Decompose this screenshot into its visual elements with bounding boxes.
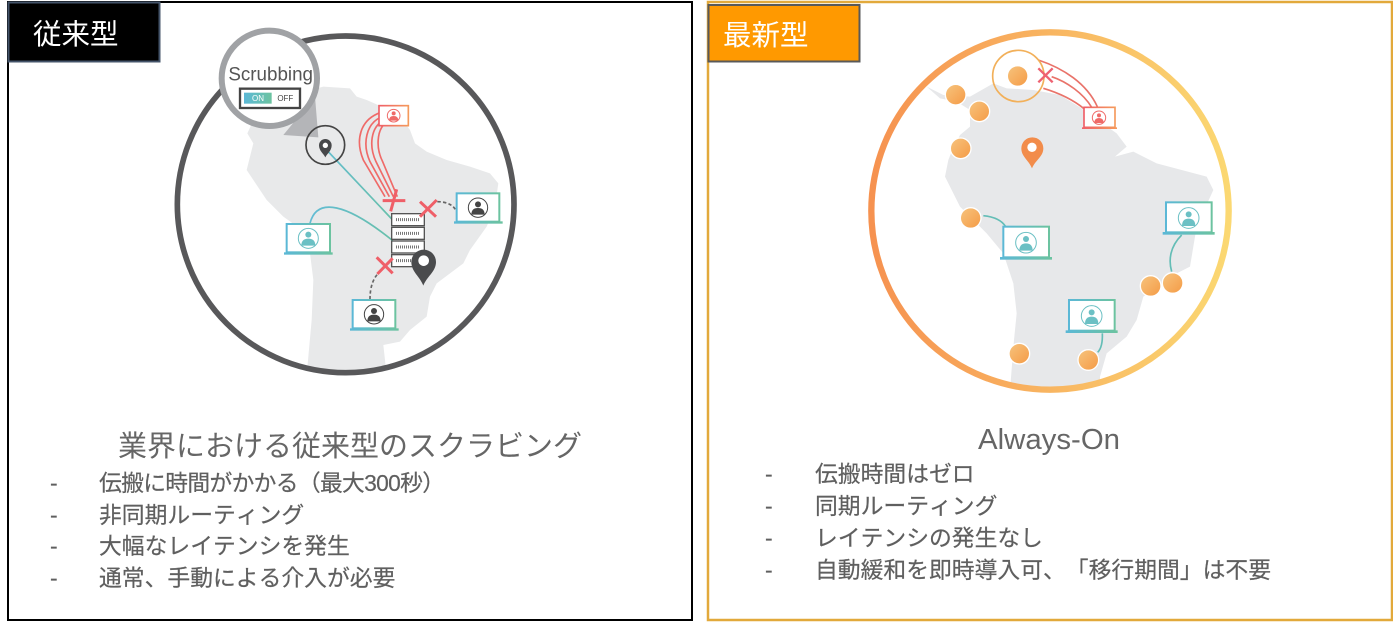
list: conventional: - <box>50 533 58 559</box>
list: latest: 伝搬時間はゼロ <box>815 461 975 487</box>
list: conventional: 通常、手動による介入が必要 <box>99 565 395 591</box>
label: latest: 最新型 <box>723 20 809 52</box>
laptop: user east <box>1163 202 1215 235</box>
list: latest: レイテンシの発生なし <box>815 525 1043 551</box>
map: South America <box>927 83 1213 390</box>
list: conventional: 非同期ルーティング <box>99 502 304 528</box>
attack traffic <box>1038 60 1097 109</box>
heading: conventional: 業界における従来型のスクラビング <box>118 430 582 463</box>
map: South America <box>247 87 498 375</box>
heading: always-on: Always-On <box>978 424 1120 456</box>
connections: blue routes <box>310 150 393 241</box>
pin in circle <box>306 126 345 164</box>
diagram: conventional scrubbing <box>177 31 514 375</box>
list: conventional: - <box>50 470 58 496</box>
callout shadow <box>283 97 318 137</box>
connections: teal <box>983 216 1182 352</box>
list: conventional: 伝搬に時間がかかる（最大300秒） <box>99 470 445 496</box>
attack traffic <box>359 113 397 197</box>
panel: latest <box>708 2 1392 620</box>
lens: scrubbing toggle <box>222 31 317 126</box>
panel: conventional <box>8 2 692 620</box>
blocked paths <box>370 202 456 299</box>
list: conventional: 大幅なレイテンシを発生 <box>99 533 350 559</box>
list: conventional: - <box>50 502 58 528</box>
server <box>392 214 424 267</box>
list: conventional <box>50 470 445 591</box>
label: conventional <box>8 2 160 62</box>
label: latest <box>708 5 860 62</box>
laptop: blue user <box>284 224 333 255</box>
laptop: attacker <box>1082 107 1117 129</box>
list: latest: - <box>765 461 773 487</box>
list: latest: 自動緩和を即時導入可、「移行期間」は不要 <box>815 557 1271 583</box>
list: conventional: - <box>50 565 58 591</box>
list: latest <box>765 461 1271 583</box>
list: latest: - <box>765 557 773 583</box>
lens: scrubbing toggle: OFF <box>277 94 293 103</box>
cross mark <box>1038 68 1053 82</box>
scrubbing nodes <box>945 66 1183 370</box>
highlight circle <box>993 50 1044 102</box>
laptop: user west <box>1000 227 1052 260</box>
laptop: blocked user right <box>454 193 503 224</box>
red blocked wall <box>383 189 405 211</box>
lens: scrubbing toggle: Scrubbing <box>228 64 313 85</box>
label: conventional: 従来型 <box>33 19 119 51</box>
pin: orange <box>1021 137 1043 168</box>
diagram: always-on <box>871 32 1229 390</box>
laptop: blocked user bottom <box>350 300 399 331</box>
laptop: user south <box>1066 300 1118 333</box>
list: latest: - <box>765 525 773 551</box>
list: latest: - <box>765 493 773 519</box>
pin: server location <box>411 250 436 286</box>
ring <box>177 36 514 373</box>
list: latest: 同期ルーティング <box>815 493 997 519</box>
lens: scrubbing toggle: ON <box>252 94 264 103</box>
cross marks <box>377 200 437 274</box>
laptop: attacker <box>379 106 408 126</box>
ring <box>871 32 1229 390</box>
